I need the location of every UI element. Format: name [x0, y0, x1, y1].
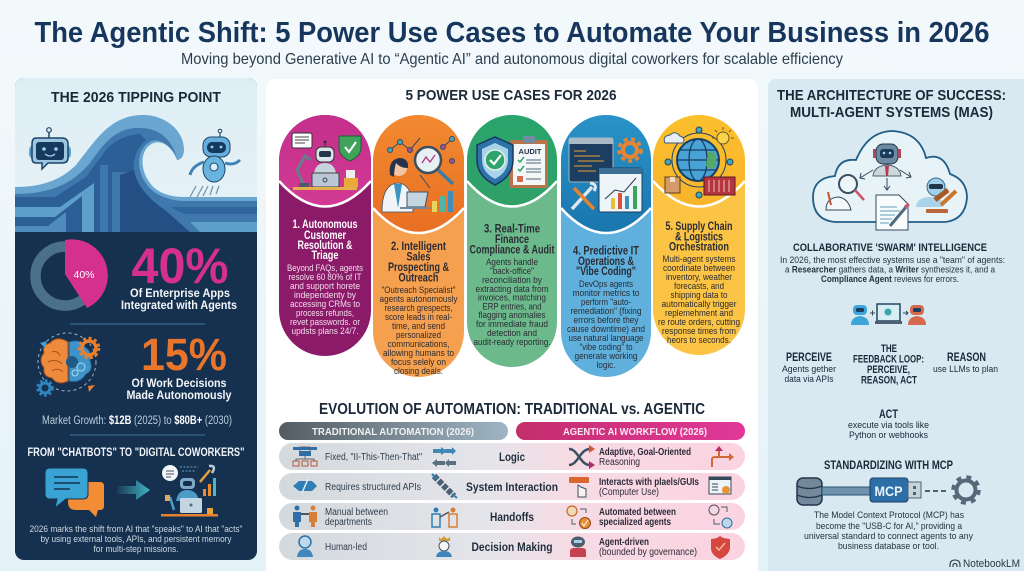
text: use case 5: inventory, weather: [666, 271, 732, 282]
text: use case 3: Compliance & Audit: [470, 244, 555, 256]
stat: 15%: Made Autonomously: [126, 388, 232, 402]
text: use case 1: Triage: [312, 250, 338, 262]
text: use case 2: Outreach: [398, 272, 438, 284]
text: use case 4: Operations &: [578, 256, 634, 268]
text: use case 5: coordinate between: [663, 262, 735, 273]
text: use case 5: Multi-agent systems: [662, 253, 736, 264]
row: handoffs: Manual between: [325, 507, 388, 518]
card: use case 5: [653, 115, 745, 355]
column header: agentic: [516, 422, 745, 440]
text: use case 4: generate working: [574, 350, 638, 361]
text: use case 3: extracting data from: [476, 283, 549, 294]
market growth line: Market Growth: $12B (2025) to $80B+ (2030): [42, 415, 232, 427]
text: use case 2: "Outreach Specialist": [382, 284, 456, 295]
text: use case 5: 5. Supply Chain: [666, 221, 732, 233]
text: use case 3: detection and: [487, 327, 537, 338]
row: handoffs: Automated between: [599, 507, 676, 518]
card: use case 1: [279, 115, 371, 356]
text: use case 5: shipping data to: [670, 289, 728, 300]
section: evolution of automation: [279, 401, 745, 560]
text: use case 3: invoices, matching: [478, 292, 546, 302]
heading: architecture: [777, 87, 1006, 121]
card: use case 4: [561, 115, 651, 377]
feedback loop: perceive: PERCEIVE: [786, 350, 832, 364]
feedback loop: reason: use LLMs to plan: [933, 364, 998, 375]
feedback loop: heading: [853, 343, 924, 386]
text: use case 2: Sales: [406, 252, 430, 264]
row: decision making: Human-led: [325, 542, 367, 553]
chart: 40% donut: [36, 239, 108, 308]
heading: architecture: MULTI-AGENT SYSTEMS (MAS): [790, 104, 993, 121]
feedback loop: heading: THE: [881, 343, 897, 355]
feedback loop: act: execute via tools like: [848, 420, 929, 431]
text: use case 3: 3. Real-Time: [484, 224, 540, 236]
heading: swarm intelligence: COLLABORATIVE 'SWARM' INTELLIGENCE: [793, 242, 987, 254]
description: chatbots to coworkers: [30, 524, 242, 554]
text: use case 5: Orchestration: [669, 242, 729, 254]
text: use case 4: DevOps agents: [579, 278, 633, 289]
row: system interaction: [279, 473, 745, 500]
logo: notebooklm: NotebookLM: [963, 558, 1020, 570]
text: use case 1: updsts plans 24/7.: [292, 325, 358, 336]
row: decision making: Decision Making: [472, 540, 552, 554]
heading: tipping point: THE 2026 TIPPING POINT: [51, 89, 221, 106]
icon: chat bubbles: [45, 468, 104, 517]
description: mcp: become the "USB-C for AI," providing a: [816, 521, 963, 532]
text: use case 4: [567, 246, 645, 370]
text: use case 1: 1. Autonomous: [292, 219, 358, 231]
row: decision making: [279, 533, 745, 560]
subtitle: Moving beyond Generative AI to “Agentic AI” and autonomous digital coworkers for scalable efficiency: [181, 51, 843, 68]
text: use case 3: ERP entries, and: [482, 300, 542, 312]
description: mcp: universal standard to connect agents to any: [804, 531, 973, 542]
row: decision making: Agent-driven: [599, 537, 649, 548]
text: use case 4: errors before they: [574, 314, 639, 325]
text: use case 2: focus selely on: [391, 356, 446, 367]
text: use case 4: "vibe coding" to: [580, 341, 632, 352]
feedback loop: perceive: [782, 350, 836, 385]
feedback loop: heading: REASON, ACT: [861, 374, 917, 386]
text: use case 3: flagging anomalies: [478, 309, 546, 320]
text: use case 2: closing deals.: [394, 365, 443, 376]
column header: traditional: [279, 422, 508, 440]
text: use case 1: [287, 219, 363, 336]
row: logic: Adaptive, Goal-Oriented: [599, 447, 691, 458]
text: use case 3: Agents handle: [486, 256, 538, 267]
illustration: agent team cloud: [813, 131, 967, 230]
column header: traditional: TRADITIONAL AUTOMATION (2026): [312, 426, 474, 438]
feedback loop: heading: PERCEIVE,: [867, 364, 910, 376]
text: use case 2: communications,: [388, 338, 450, 349]
icon: chatbot: [29, 128, 71, 169]
row: handoffs: departments: [325, 517, 372, 528]
feedback loop: reason: REASON: [947, 350, 986, 364]
text: use case 1: Resolution &: [298, 240, 352, 252]
column header: agentic: AGENTIC AI WORKFLOW (2026): [563, 426, 707, 438]
icon: robot support desk: [292, 133, 361, 190]
stat: 40%: [121, 238, 237, 312]
icon: shield and audit clipboard: [477, 136, 548, 188]
row: system interaction: System Interaction: [466, 480, 558, 494]
text: use case 5: heors to seconds.: [667, 334, 731, 345]
stat: 40%: 40%: [132, 238, 228, 294]
icon: mcp connector: [797, 477, 979, 505]
feedback loop: perceive: data via APIs: [784, 374, 834, 385]
description: mcp: The Model Context Protocol (MCP) has: [814, 510, 964, 521]
row: decision making: (bounded by governance): [599, 547, 697, 558]
text: use case 4: cause downtime) and: [567, 323, 645, 334]
row: system interaction: Requires structured APIs: [325, 482, 421, 493]
text: use case 4: "Vibe Coding": [576, 266, 636, 278]
description: mcp: [804, 510, 973, 552]
text: use case 2: Prospecting &: [388, 262, 449, 274]
text: use case 3: reconciliation by: [482, 274, 542, 285]
icon: global logistics: [664, 127, 735, 198]
description: chatbots to coworkers: for multi-step missions.: [94, 544, 178, 554]
card: use case 3: [467, 115, 557, 367]
text: use case 3: Finance: [495, 234, 529, 246]
text: use case 2: 2. Intelligent: [391, 241, 446, 253]
text: use case 1: Beyond FAQs, agents: [287, 262, 363, 273]
heading: chatbots to digital coworkers: FROM "CHATBOTS" TO "DIGITAL COWORKERS": [28, 447, 244, 459]
arrow: chatbots to coworkers: [117, 480, 150, 500]
row: logic: Fixed, "II-This-Then-That": [325, 452, 422, 463]
description: chatbots to coworkers: 2026 marks the shift from AI that "speaks" to AI that "acts": [30, 524, 242, 534]
stat: 15%: [126, 329, 232, 402]
text: use case 5: automatically trigger: [662, 298, 736, 309]
stat: 15%: Of Work Decisions: [132, 376, 227, 390]
icon: agent handoff: [851, 304, 926, 325]
feedback loop: perceive: Agents gether: [782, 364, 836, 375]
panel: 5 power use cases: [266, 79, 758, 571]
text: use case 2: allowing humans to: [383, 347, 454, 358]
text: use case 1: and support horete: [290, 280, 360, 291]
description: mcp: business database or tool.: [838, 541, 939, 552]
text: use case 1: independenty by: [294, 289, 356, 300]
row: handoffs: [279, 503, 745, 530]
icon: brain and gears: [38, 333, 99, 396]
text: use case 5: replemehment and: [665, 307, 733, 318]
illustration: circuit wave: [15, 115, 257, 232]
stat: 15%: 15%: [141, 329, 227, 380]
description: swarm intelligence: Compliance Agent reviews for errors.: [821, 274, 959, 284]
description: swarm intelligence: In 2026, the most effective systems use a "team" of agents:: [780, 255, 1005, 265]
card: use case 2: [373, 115, 464, 377]
text: use case 3: for immediate fraud: [476, 318, 548, 329]
text: use case 3: "back-office": [490, 265, 534, 276]
feedback loop: act: ACT: [879, 407, 899, 421]
text: use case 5: [658, 221, 740, 345]
panel: architecture of success: [768, 79, 1024, 571]
text: use case 2: time, and send: [392, 320, 445, 331]
text: use case 5: response times from: [662, 325, 736, 336]
text: use case 4: use natural language: [568, 332, 644, 343]
stat: 40%: Integrated with Agents: [121, 298, 237, 312]
icon: surfing robot: [190, 129, 240, 197]
text: use case 1: revet passwords. or: [290, 316, 360, 327]
feedback loop: act: Python or webhooks: [849, 430, 928, 441]
text: use case 5: re route orders, cutting: [658, 316, 740, 327]
heading: standardizing with mcp: STANDARDIZING WITH MCP: [824, 460, 953, 472]
row: logic: Reasoning: [599, 457, 640, 468]
text: use case 2: agents autonomously: [380, 293, 458, 304]
text: use case 4: 4. Predictive IT: [573, 246, 639, 258]
text: use case 1: process refunds,: [296, 307, 354, 318]
text: use case 3: [470, 224, 555, 347]
row: handoffs: Handoffs: [490, 510, 534, 524]
text: use case 2: score leads in real-: [385, 311, 452, 322]
description: swarm intelligence: [780, 255, 1005, 284]
feedback loop: heading: FEEDBACK LOOP:: [853, 354, 924, 366]
feedback loop: act: [848, 407, 929, 441]
text: use case 3: audit-ready reporting.: [474, 336, 550, 347]
text: use case 2: personalized: [396, 329, 441, 340]
panel: the 2026 tipping point: [15, 78, 257, 560]
stat: 40%: Of Enterprise Apps: [130, 286, 230, 300]
text: use case 5: & Logistics: [675, 232, 723, 244]
row: logic: Logic: [499, 450, 525, 464]
text: use case 5: forecasts, and: [674, 280, 724, 291]
text: use case 4: monitor metrics to: [572, 287, 640, 298]
text: use case 2: research grespects,: [384, 302, 452, 313]
heading: evolution: EVOLUTION OF AUTOMATION: TRADITIONAL vs. AGENTIC: [319, 401, 705, 418]
feedback loop: reason: [933, 350, 998, 375]
text: use case 1: accessing CRMs to: [290, 298, 360, 309]
text: use case 4: logic.: [596, 359, 616, 370]
text: use case 2: [380, 241, 458, 376]
row: logic: [279, 443, 745, 470]
icon: robot coworker: [161, 465, 218, 516]
icon: devops windows: [569, 138, 642, 212]
icon: sales researcher: [382, 136, 454, 212]
row: system interaction: (Computer Use): [599, 487, 659, 498]
description: chatbots to coworkers: by using external tools, APIs, and persistent memory: [40, 534, 232, 544]
text: use case 4: remediation" (fixing: [570, 305, 642, 316]
chart: 40% donut: 40%: [73, 269, 95, 281]
icon: shield and audit clipboard: AUDIT: [519, 147, 542, 156]
text: use case 1: resolve 60 80% of IT: [288, 271, 362, 282]
description: swarm intelligence: a Researcher gathers data, a Writer synthesizes it, and a: [785, 264, 995, 274]
row: system interaction: Interacts with plaels/GUIs: [599, 477, 699, 488]
row: handoffs: specialized agents: [599, 517, 671, 528]
icon: mcp connector: MCP: [874, 483, 902, 499]
title: The Agentic Shift: 5 Power Use Cases to Automate Your Business in 2026: [34, 17, 990, 49]
text: use case 1: Customer: [304, 230, 346, 242]
heading: use cases: 5 POWER USE CASES FOR 2026: [406, 87, 616, 104]
text: use case 4: perform "auto-: [581, 296, 631, 307]
